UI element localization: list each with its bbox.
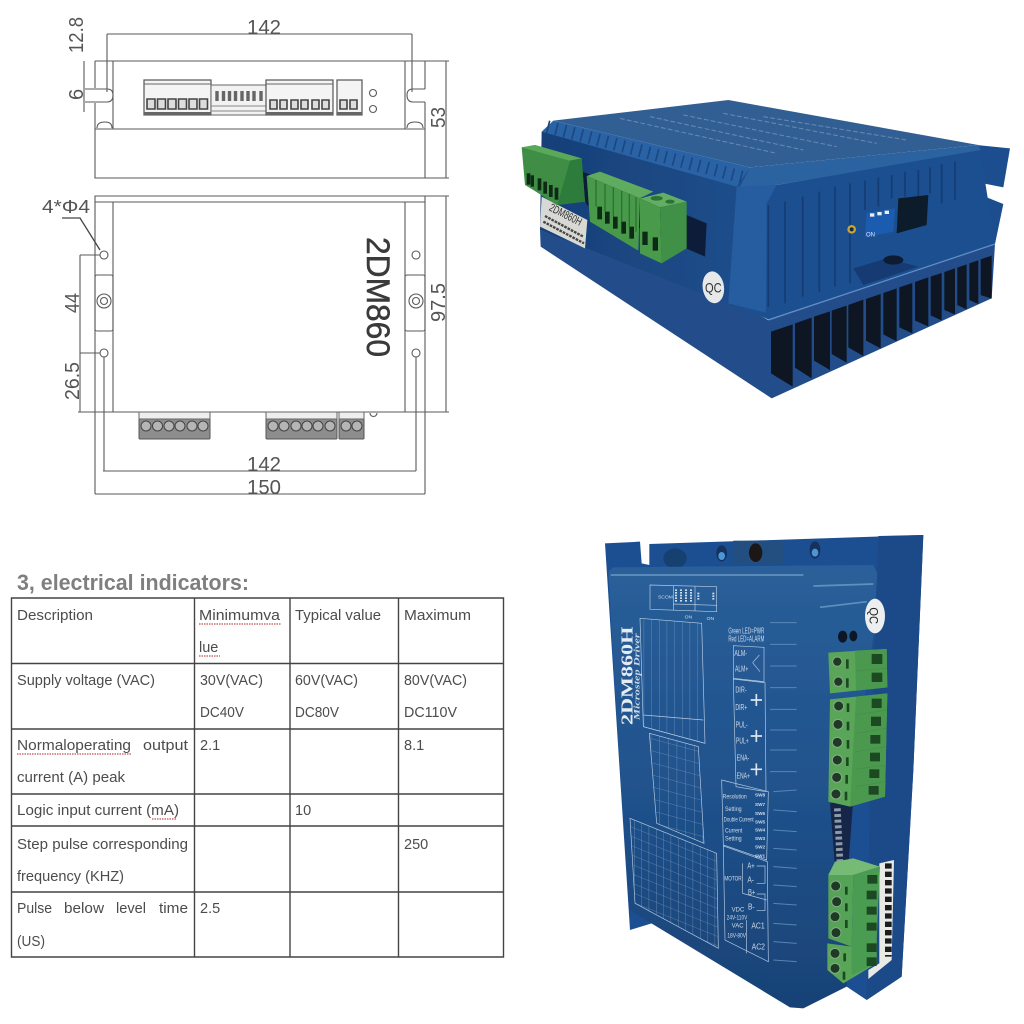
connector side face — [540, 132, 750, 310]
rating label: 2DM860H — [547, 202, 584, 229]
control signal box: DIR- — [735, 686, 747, 695]
control signal box: ENA- — [737, 754, 750, 763]
current setting table — [640, 618, 705, 743]
motor and power box: MOTOR — [724, 876, 742, 883]
row: normal operating output current: Normaloperating — [17, 738, 131, 754]
mounting flange — [970, 145, 1010, 244]
body outline — [95, 196, 425, 412]
header row: Minimumva — [199, 608, 281, 624]
row: supply voltage: Supply voltage (VAC) — [17, 673, 155, 689]
model name: 2DM860H — [618, 627, 637, 725]
row: logic input current: 10 — [295, 803, 311, 819]
row: logic input current: Logic input current (mA) — [17, 803, 179, 819]
dip switch block — [211, 85, 266, 115]
row: supply voltage: 30V(VAC) — [200, 673, 263, 689]
top face — [553, 100, 978, 167]
green connector: power pair — [827, 940, 877, 983]
dip switch legend box — [650, 585, 717, 622]
row: pulse below level time: (US) — [17, 934, 45, 950]
row: normal operating output current: 2.1 — [200, 738, 220, 754]
rounded corner — [728, 185, 777, 313]
table grid — [12, 598, 504, 957]
motor and power box: A+ — [747, 861, 755, 870]
panel: electrical indicators table — [12, 570, 504, 957]
QC sticker — [865, 599, 885, 633]
connector pins bottom left — [139, 412, 210, 439]
end face — [728, 149, 995, 319]
control signal box: PUL- — [736, 721, 748, 730]
recess behind connectors — [575, 168, 707, 257]
row: step pulse frequency: frequency (KHZ) — [17, 869, 124, 885]
heat sink base — [540, 230, 995, 398]
header row: Description — [17, 608, 93, 624]
green connector: rear — [522, 145, 585, 205]
panel: bottom view technical drawing — [42, 196, 450, 499]
dimension: 12.8: 12.8 — [66, 17, 88, 53]
header row: lue — [199, 640, 218, 656]
QC sticker: QC — [705, 280, 722, 296]
ribbed edge — [542, 121, 750, 187]
row: supply voltage: 60V(VAC) — [295, 673, 358, 689]
row: logic input current — [17, 803, 311, 819]
row: supply voltage: DC40V — [200, 705, 244, 721]
settings box: Double Current — [724, 817, 754, 824]
dimension: 97.5: 97.5 — [428, 283, 450, 322]
settings box: SW7 — [755, 802, 765, 807]
dimension: width 142 — [107, 17, 412, 92]
dimension: 53 — [425, 61, 450, 178]
row: pulse below level time: below — [64, 901, 105, 917]
row: normal operating output current: 8.1 — [404, 738, 424, 754]
row: pulse below level time: time — [159, 901, 188, 917]
dip switch legend box: ON — [685, 615, 693, 621]
alarm signal box: ALM+ — [735, 665, 749, 674]
network port — [897, 195, 928, 233]
motor and power box: VAC — [732, 923, 744, 929]
dimension: 6: 6 — [66, 89, 88, 100]
motor and power box — [723, 846, 768, 962]
control signal box: DIR+ — [735, 703, 748, 712]
green connector: signal six pole — [828, 693, 887, 807]
control signal box: ENA+ — [737, 771, 750, 780]
row: step pulse frequency: 250 — [404, 837, 428, 853]
header row: Maximum — [404, 608, 471, 624]
back plate with flanges — [605, 535, 923, 1000]
motor and power box: 24V-110V — [727, 915, 747, 921]
rating label — [540, 197, 587, 248]
bracket screw — [883, 255, 903, 265]
alarm signal box: ALM- — [734, 649, 747, 658]
settings box: Setting — [725, 836, 742, 843]
dimension: 44 — [62, 255, 100, 353]
motor and power box: A- — [747, 876, 754, 885]
settings box: SW4 — [755, 828, 765, 833]
photo: driver with heat sink fins, three-quarter view — [522, 100, 1010, 398]
green connector: alarm pair — [828, 649, 887, 693]
dimension: lower 142 — [103, 357, 416, 476]
dimension: 97.5 — [425, 196, 450, 412]
motor and power box: B- — [748, 902, 755, 911]
settings box: SW8 — [755, 793, 765, 798]
mounting bracket — [853, 258, 918, 285]
top flange details — [663, 541, 820, 568]
large resolution table — [630, 818, 718, 948]
row: supply voltage: DC110V — [404, 705, 457, 721]
green connector: six pole — [587, 172, 653, 251]
row: pulse below level time: 2.5 — [200, 901, 220, 917]
terminal block: two pole — [337, 80, 362, 116]
settings box: SW3 — [755, 836, 765, 841]
top face printing — [620, 113, 907, 153]
hole callout 4*Φ4: 4*Φ4 — [42, 197, 90, 217]
heat sink edge highlight — [768, 244, 995, 320]
LED legend: Red LED=ALARM — [728, 635, 764, 644]
motor and power box: AC1 — [751, 921, 765, 930]
dimension: 26.5: 26.5 — [62, 362, 84, 400]
settings box: Setting — [725, 806, 742, 813]
QC sticker — [701, 270, 726, 305]
product subtitle: Microstep Driver — [631, 632, 641, 721]
motor and power box: B+ — [748, 888, 756, 897]
header row — [17, 608, 471, 656]
control signal box — [733, 679, 766, 792]
dimension: 150 — [95, 412, 425, 499]
LED legend: Green LED=PWR — [728, 626, 764, 635]
resolution table — [649, 733, 704, 843]
top view outline — [85, 61, 425, 178]
dip switch legend box: SCOM — [658, 594, 673, 600]
dip switch legend box: ON — [707, 616, 715, 622]
settings box: SW1 — [755, 854, 765, 859]
row: step pulse frequency: Step pulse corresponding — [17, 837, 188, 853]
connector pins bottom right — [266, 412, 377, 439]
DIP switch panel: ON — [866, 233, 875, 239]
LED legend — [728, 626, 764, 644]
settings box: Resolution — [723, 793, 747, 800]
row: supply voltage — [17, 673, 467, 721]
settings box: SW6 — [755, 811, 765, 816]
row: pulse below level time: level — [116, 901, 146, 917]
row: normal operating output current: current (A) peak — [17, 770, 126, 786]
hole callout 4*Φ4 — [42, 197, 100, 250]
dimension: 53: 53 — [428, 107, 450, 128]
settings box: SW5 — [755, 819, 765, 824]
heat sink fins — [771, 256, 992, 387]
row: supply voltage: 80V(VAC) — [404, 673, 467, 689]
panel: top view technical drawing — [66, 17, 450, 178]
motor and power box: AC2 — [752, 942, 765, 951]
front face highlights — [611, 575, 873, 607]
dimension: 26.5 — [62, 353, 95, 412]
indicator LEDs — [838, 631, 857, 643]
model label 2DM860: 2DM860 — [360, 237, 396, 357]
DIP switch panel — [847, 208, 895, 239]
front face — [608, 565, 877, 1008]
green connector: motor four pole — [828, 858, 880, 947]
dimension: lower 142: 142 — [247, 454, 281, 476]
row: pulse below level time: Pulse — [17, 901, 52, 917]
terminal block: six pole right — [266, 80, 333, 116]
row: normal operating output current: output — [143, 738, 188, 754]
settings box: SW2 — [755, 844, 765, 849]
top edge bevel — [740, 145, 981, 187]
dimension: width 142: 142 — [247, 17, 281, 39]
side slots — [770, 623, 797, 962]
right flange shading — [867, 535, 923, 1000]
row: step pulse frequency — [17, 837, 428, 885]
channel with heat-sink beads — [830, 798, 853, 867]
dimension: 150: 150 — [247, 477, 281, 499]
table heading: 3, electrical indicators: — [17, 570, 249, 595]
motor and power box: 18V-80V — [727, 933, 746, 939]
photo: driver front panel, upright view — [605, 535, 923, 1008]
green connector: two pole — [640, 193, 687, 263]
alarm signal box — [733, 646, 764, 682]
header row: Typical value — [295, 608, 381, 624]
terminal block: six pole left — [144, 80, 211, 116]
control signal box: PUL+ — [736, 736, 749, 745]
end face slots — [768, 162, 955, 307]
row: supply voltage: DC80V — [295, 705, 339, 721]
dimension: 12.8 — [66, 17, 88, 112]
rating label strip — [868, 860, 894, 979]
motor and power box: VDC — [732, 908, 745, 914]
dimension: 44: 44 — [62, 293, 84, 313]
indicator LEDs — [370, 90, 376, 112]
row: pulse below level time — [17, 901, 220, 950]
QC sticker: QC — [866, 607, 880, 624]
row: normal operating output current — [17, 738, 424, 786]
settings box: Current — [725, 828, 742, 835]
settings box — [722, 780, 768, 860]
